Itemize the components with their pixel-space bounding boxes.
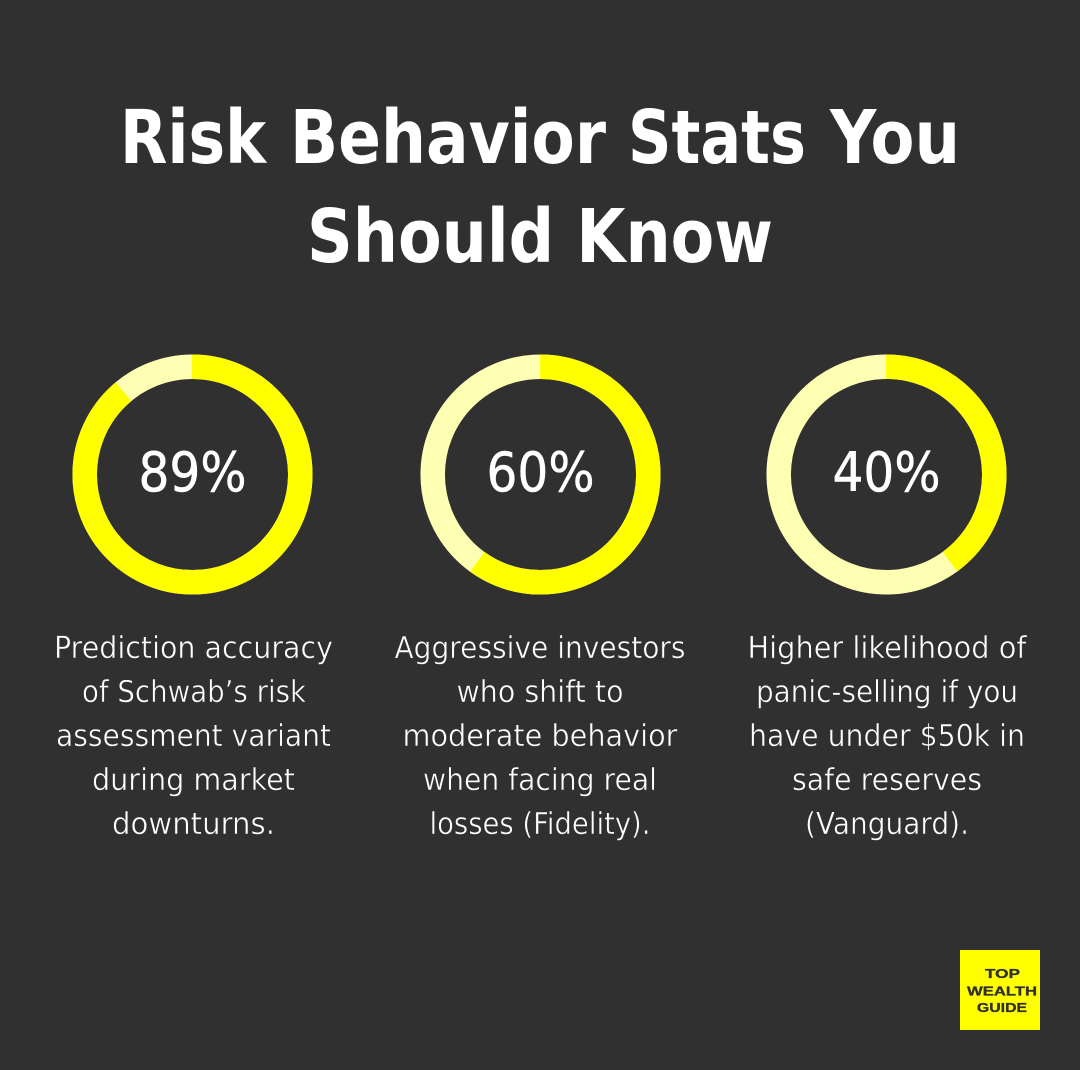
description: Vanguard: panic-selling if you	[756, 675, 1018, 710]
description: Fidelity	[394, 631, 686, 842]
description: Schwab: assessment variant	[56, 719, 331, 754]
donut chart: 60%	[433, 367, 648, 582]
title: Stats	[628, 95, 806, 181]
title: You	[829, 95, 960, 181]
value: 60%: 60%	[486, 441, 594, 504]
logo: Top Wealth Guide: TOP	[985, 967, 1020, 981]
donut chart: 40%	[779, 367, 994, 582]
panel: stat 89%	[54, 367, 333, 842]
description: Fidelity: when facing real	[423, 763, 657, 798]
description: Vanguard: Higher likelihood of	[748, 631, 1028, 666]
description: Vanguard: (Vanguard).	[805, 807, 969, 842]
logo: Top Wealth Guide: WEALTH	[967, 984, 1037, 998]
description: Vanguard: have under $50k in	[749, 719, 1025, 754]
value: 89%: 89%	[138, 441, 246, 504]
description: Vanguard: safe reserves	[792, 763, 982, 798]
panel: stat 60%	[394, 367, 686, 842]
description: Schwab: during market	[92, 763, 295, 798]
logo: Top Wealth Guide	[960, 950, 1040, 1030]
description: Schwab: Prediction accuracy	[54, 631, 333, 666]
donut chart: 89%	[85, 367, 300, 582]
description: Fidelity: losses (Fidelity).	[430, 807, 650, 842]
description: Schwab	[54, 631, 333, 842]
title: Behavior	[290, 95, 606, 181]
title: Should Know	[307, 194, 773, 280]
description: Schwab: of Schwab’s risk	[82, 675, 307, 710]
description: Vanguard	[748, 631, 1028, 842]
description: Schwab: downturns.	[112, 807, 275, 842]
title: Risk	[120, 95, 267, 181]
logo: Top Wealth Guide: GUIDE	[977, 1001, 1027, 1015]
description: Fidelity: who shift to	[456, 675, 624, 710]
description: Fidelity: moderate behavior	[402, 719, 678, 754]
description: Fidelity: Aggressive investors	[394, 631, 686, 666]
value: 40%: 40%	[832, 441, 940, 504]
title	[120, 95, 960, 280]
panel: stat 40%	[748, 367, 1028, 842]
